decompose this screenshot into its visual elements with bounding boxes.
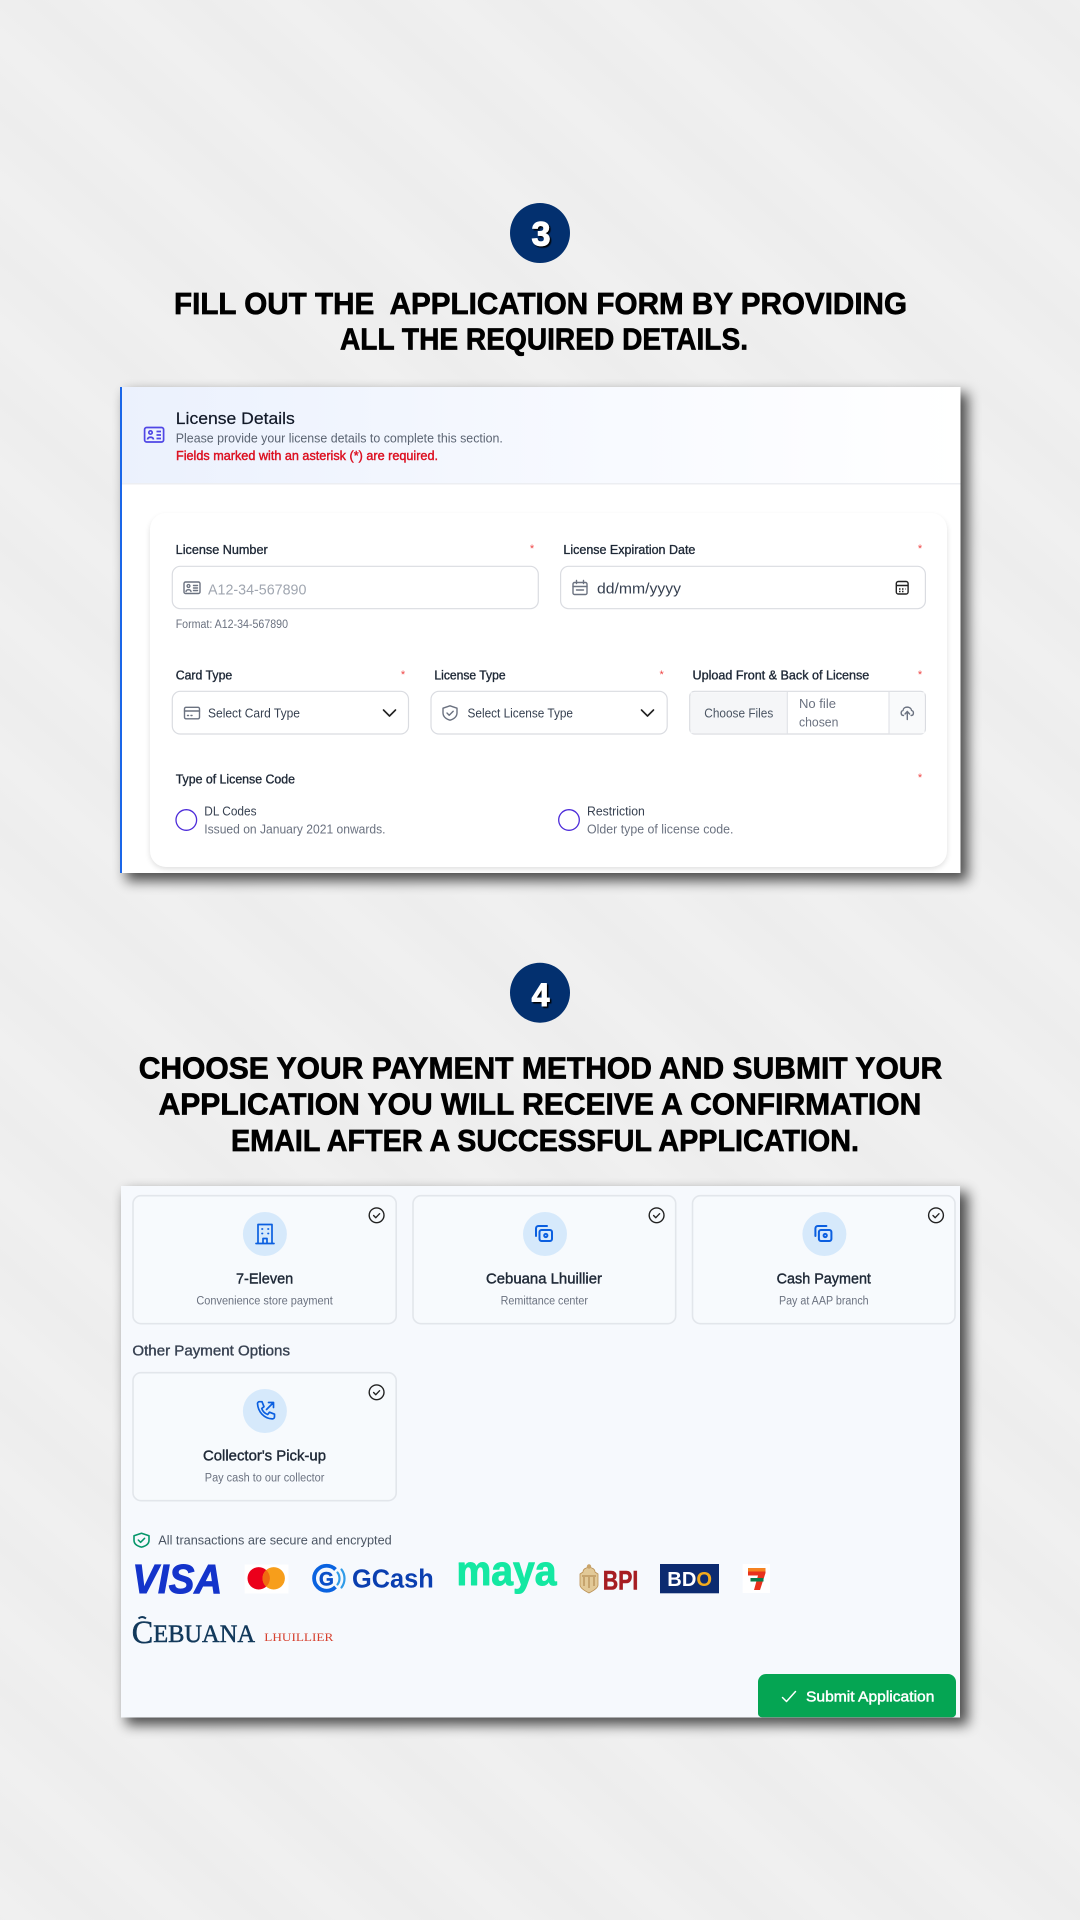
logo: Cebuana Lhuillier: C [132, 1615, 153, 1651]
field: upload front and back of license: Upload Front & Back of License [692, 668, 869, 682]
option card: 7-Eleven [133, 1196, 396, 1324]
field: license number: Format: A12-34-567890 [176, 619, 288, 631]
logo: BDO [660, 1564, 719, 1593]
step 4 heading: APPLICATION YOU WILL RECEIVE A CONFIRMATION [159, 1086, 921, 1121]
field: upload front and back of license [690, 668, 925, 734]
step 4 number badge: 4 [532, 977, 550, 1013]
field: license number: A12-34-567890 [208, 582, 306, 598]
option card: cash payment [692, 1196, 955, 1324]
step 3 heading [174, 286, 907, 357]
field: card type: * [401, 669, 406, 681]
field: card type [172, 668, 408, 734]
option card: 7-Eleven: 7-Eleven [236, 1271, 293, 1288]
logo: 7-Eleven [743, 1564, 770, 1593]
field: type of license code: Type of License Code [176, 773, 295, 787]
other payment options heading: Other Payment Options [132, 1343, 290, 1359]
option card: cash payment: Cash Payment [777, 1271, 872, 1288]
field: license type: * [659, 669, 664, 681]
radio option: restriction: Older type of license code. [587, 823, 734, 837]
section title and notes: License Details [176, 410, 295, 428]
section title and notes [176, 410, 503, 463]
step 4 heading [139, 1050, 942, 1158]
section title and notes: Fields marked with an asterisk (*) are required. [176, 449, 438, 463]
logo: GCash: G [319, 1570, 334, 1590]
logo: Maya: maya [456, 1547, 557, 1594]
logo: BDO: BDO [667, 1569, 712, 1591]
logo: Cebuana Lhuillier [132, 1615, 333, 1651]
logo: BPI: BPI [603, 1565, 638, 1595]
field: card type: Select Card Type [208, 705, 300, 720]
field: license expiration date: License Expiration Date [563, 543, 695, 557]
field: license expiration date: dd/mm/yyyy [597, 580, 682, 598]
logo: Visa: VISA [132, 1556, 222, 1602]
field: type of license code: * [918, 772, 923, 784]
radio option: DL codes [176, 805, 386, 837]
field: license expiration date [561, 543, 925, 609]
option card: cash payment: Pay at AAP branch [779, 1296, 869, 1308]
step 3 heading: FILL OUT THE APPLICATION FORM BY PROVIDING [174, 286, 907, 321]
option card: Cebuana Lhuillier: Cebuana Lhuillier [486, 1271, 602, 1288]
field: license type: License Type [434, 668, 506, 682]
panel: payment options [121, 1186, 968, 1725]
step 3 heading: ALL THE REQUIRED DETAILS. [340, 322, 748, 357]
logo: BPI [580, 1564, 638, 1595]
field: upload front and back of license: No file [799, 697, 836, 711]
step 4 heading: EMAIL AFTER A SUCCESSFUL APPLICATION. [231, 1123, 859, 1158]
field: type of license code [176, 772, 923, 837]
option card: Cebuana Lhuillier [413, 1196, 676, 1324]
option card: Cebuana Lhuillier: Remittance center [501, 1296, 588, 1308]
section title and notes: Please provide your license details to complete this section. [176, 431, 503, 446]
field: license number: * [530, 543, 535, 555]
step 4 number badge [510, 963, 570, 1023]
submit application button [758, 1674, 956, 1717]
field: license type [431, 668, 667, 734]
field: card type: Card Type [176, 668, 232, 682]
field: license type: Select License Type [468, 705, 573, 720]
field: upload front and back of license: * [918, 669, 923, 681]
logo: Cebuana Lhuillier: LHUILLIER [264, 1630, 333, 1644]
field: upload front and back of license: Choose Files [704, 705, 774, 720]
field: license number [172, 543, 538, 631]
logo: GCash: GCash [352, 1566, 434, 1594]
option card: collector's pick-up: Collector's Pick-up [203, 1448, 326, 1465]
logo: GCash [314, 1566, 434, 1594]
security note: All transactions are secure and encrypted [158, 1533, 392, 1547]
panel: license details form [120, 387, 968, 881]
option card: collector's pick-up [133, 1373, 396, 1501]
inner form card [150, 513, 947, 869]
submit application button: Submit Application [806, 1689, 934, 1706]
logo: Mastercard [245, 1564, 288, 1594]
radio option: DL codes: Issued on January 2021 onwards. [204, 823, 386, 837]
radio option: restriction: Restriction [587, 805, 645, 819]
field: upload front and back of license: chosen [799, 716, 838, 730]
radio option: DL codes: DL Codes [204, 805, 256, 819]
icon: license id card [145, 428, 164, 442]
option card: 7-Eleven: Convenience store payment [196, 1296, 334, 1308]
logo: Cebuana Lhuillier: EBUANA [153, 1621, 255, 1648]
radio option: restriction [559, 805, 734, 837]
step 3 number badge: 3 [532, 216, 550, 254]
field: license expiration date: * [918, 543, 923, 555]
option card: collector's pick-up: Pay cash to our collector [205, 1473, 325, 1485]
step 4 heading: CHOOSE YOUR PAYMENT METHOD AND SUBMIT YOUR [139, 1050, 942, 1085]
field: license number: License Number [176, 543, 268, 557]
step 3 number badge [510, 203, 570, 263]
